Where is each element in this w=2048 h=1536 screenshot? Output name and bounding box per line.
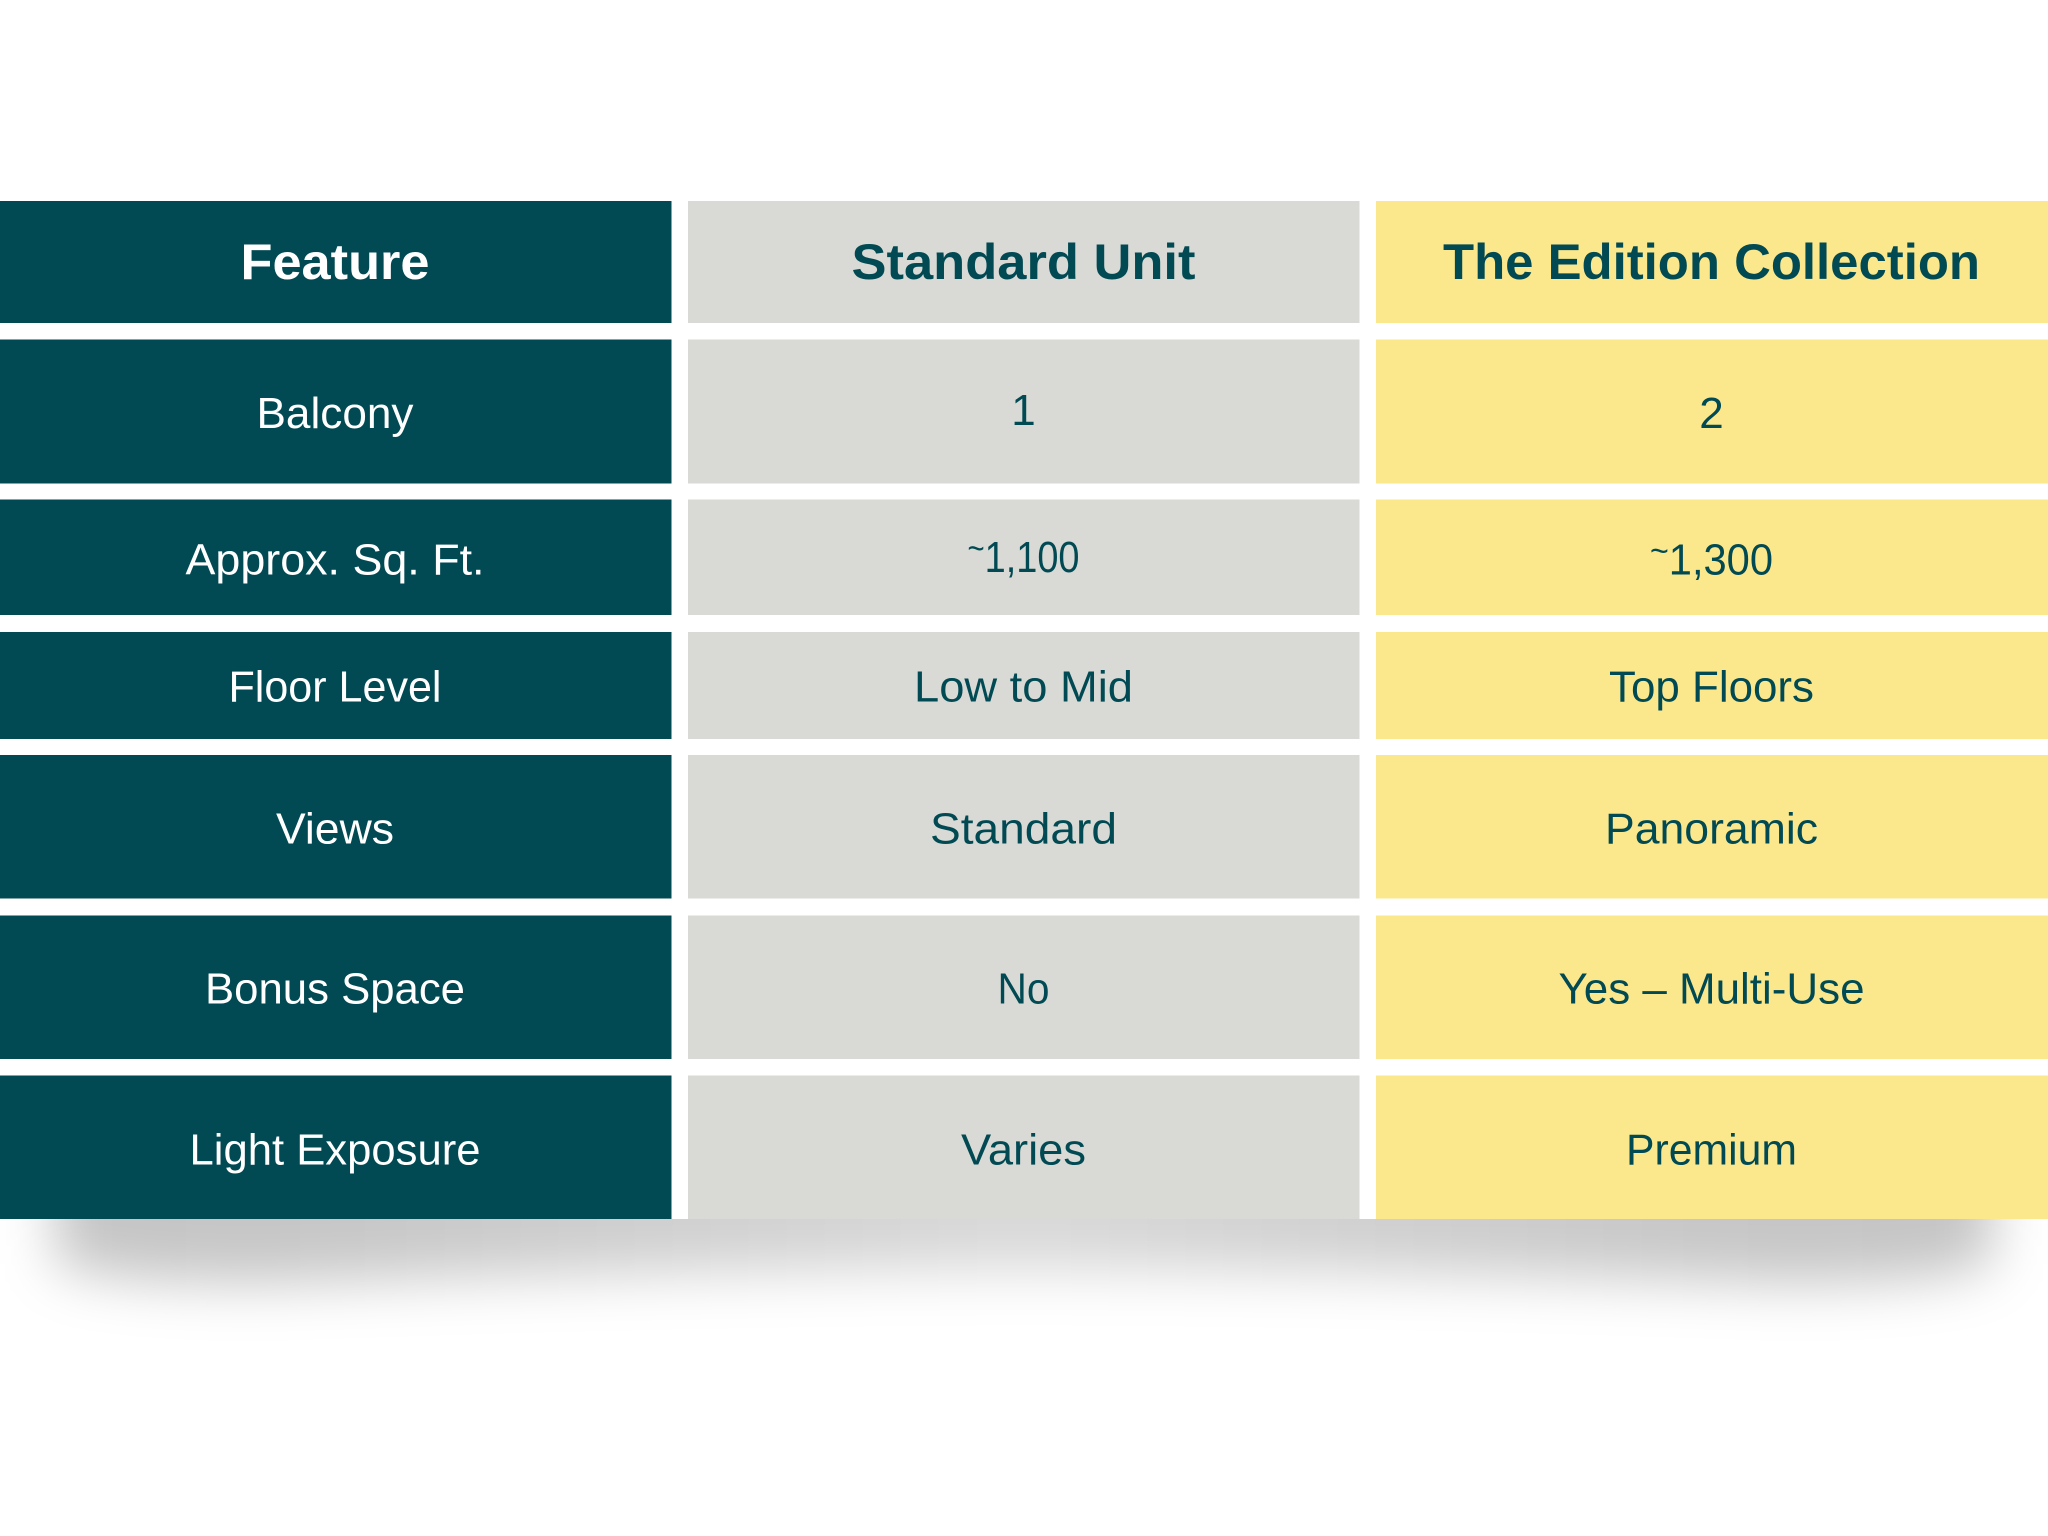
row: Approx. Sq. Ft. edition value — [1376, 500, 2048, 615]
row: Light Exposure standard value — [688, 1076, 1360, 1219]
row: Approx. Sq. Ft. edition value: ~ — [1650, 532, 1669, 570]
row: Light Exposure label: Light Exposure — [190, 1126, 480, 1174]
row: Approx. Sq. Ft. edition value: 1,300 — [1669, 536, 1773, 584]
row: Approx. Sq. Ft. label — [0, 500, 672, 615]
row: Balcony standard value — [688, 340, 1360, 484]
row: Bonus Space standard value: No — [998, 964, 1050, 1014]
row: Views standard value — [688, 755, 1360, 898]
row: Approx. Sq. Ft. standard value — [688, 500, 1360, 615]
header: Feature — [0, 201, 672, 323]
row: Balcony label: Balcony — [256, 389, 414, 438]
row: Approx. Sq. Ft. label: Approx. Sq. Ft. — [186, 536, 484, 584]
row: Balcony edition value: 2 — [1699, 389, 1724, 438]
row: Views label: Views — [276, 804, 394, 854]
drop shadow under table — [27, 1219, 2021, 1311]
row: Bonus Space edition value — [1376, 916, 2048, 1059]
header: Standard Unit: Standard Unit — [852, 234, 1196, 290]
row: Balcony edition value — [1376, 340, 2048, 484]
row: Views edition value — [1376, 755, 2048, 898]
header: Feature: Feature — [240, 234, 430, 290]
row: Views edition value: Panoramic — [1605, 804, 1818, 854]
row: Bonus Space standard value — [688, 916, 1360, 1059]
row: Balcony label — [0, 340, 672, 484]
row: Light Exposure label — [0, 1076, 672, 1219]
row: Floor Level label — [0, 632, 672, 739]
row: Light Exposure standard value: Varies — [961, 1126, 1086, 1174]
row: Views standard value: Standard — [930, 804, 1117, 854]
row: Light Exposure edition value — [1376, 1076, 2048, 1219]
header: Standard Unit — [688, 201, 1360, 323]
row: Approx. Sq. Ft. standard value: ~ — [968, 530, 985, 568]
row: Balcony standard value: 1 — [1011, 386, 1036, 435]
header: The Edition Collection — [1376, 201, 2048, 323]
row: Light Exposure edition value: Premium — [1626, 1126, 1797, 1174]
row: Floor Level edition value — [1376, 632, 2048, 739]
row: Views label — [0, 755, 672, 898]
row: Approx. Sq. Ft. standard value: 1,100 — [985, 533, 1080, 582]
row: Floor Level standard value: Low to Mid — [914, 662, 1133, 712]
comparison table — [0, 201, 2048, 1219]
row: Bonus Space label — [0, 916, 672, 1059]
row: Floor Level edition value: Top Floors — [1609, 662, 1814, 712]
header: The Edition Collection: The Edition Collection — [1443, 234, 1980, 290]
row: Bonus Space edition value: Yes – Multi-Use — [1558, 964, 1864, 1014]
row: Floor Level standard value — [688, 632, 1360, 739]
row: Bonus Space label: Bonus Space — [205, 964, 465, 1014]
row: Floor Level label: Floor Level — [228, 662, 442, 712]
